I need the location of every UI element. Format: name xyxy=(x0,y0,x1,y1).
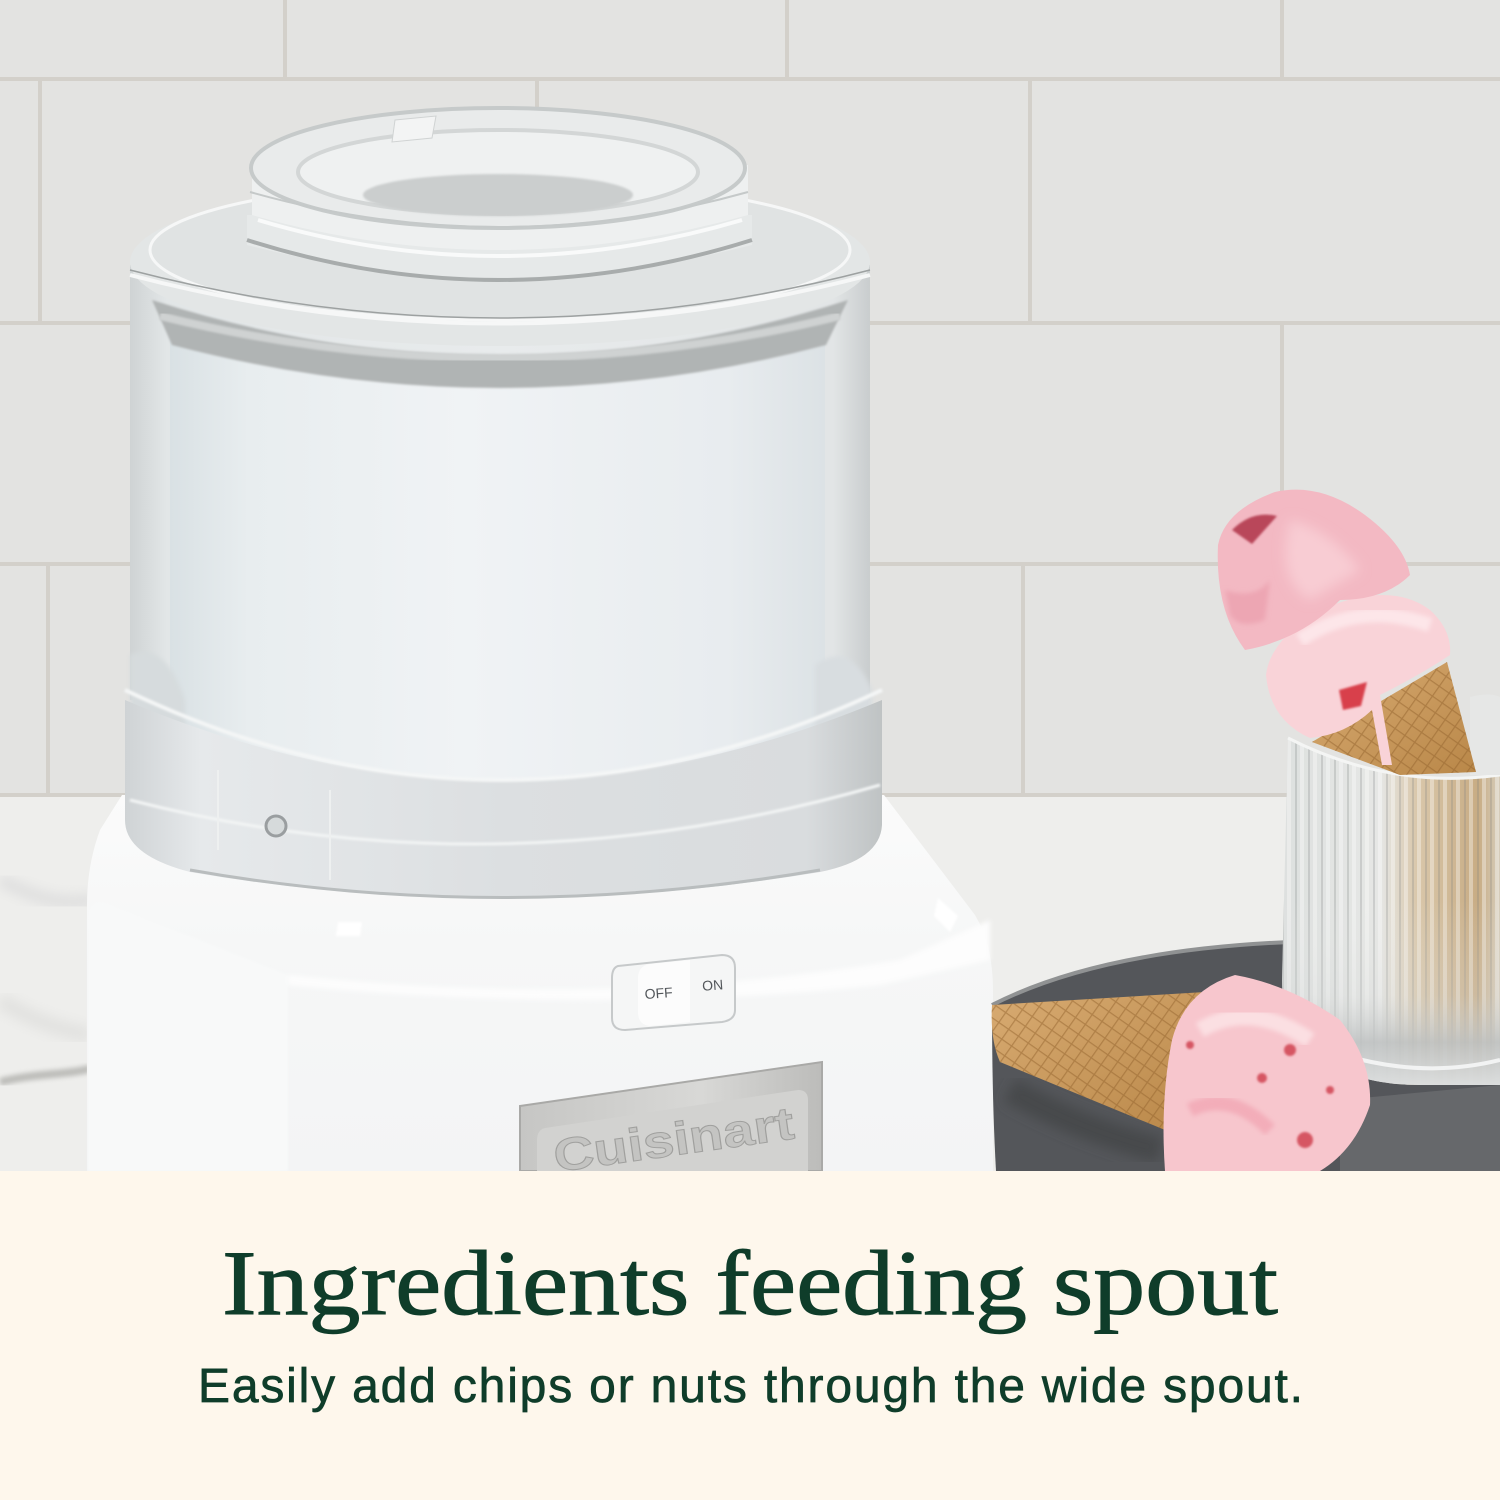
caption panel xyxy=(0,1171,1500,1500)
metal brand badge xyxy=(520,1062,822,1182)
photo scene xyxy=(0,0,1500,1182)
collar ring xyxy=(125,690,882,898)
tiled wall xyxy=(0,0,1500,800)
ice cream scoop on plate xyxy=(1164,975,1370,1171)
white base xyxy=(87,795,993,1171)
power switch xyxy=(612,955,735,1030)
subheading: Easily add chips or nuts through the wide spout. xyxy=(198,1360,1303,1413)
white freezer bowl xyxy=(130,270,872,790)
power switch: OFF xyxy=(644,984,673,1002)
metal brand badge: Cuisinart xyxy=(550,1097,797,1182)
feeding spout xyxy=(247,108,752,280)
marble counter xyxy=(0,797,1286,1171)
waffle cone in glass xyxy=(1312,662,1476,775)
clear outer lid cylinder xyxy=(130,178,870,700)
glass with cone xyxy=(1282,736,1500,1085)
stacked ice cream scoops xyxy=(1218,490,1450,765)
collar latch xyxy=(266,816,286,836)
waffle cone on plate xyxy=(992,992,1205,1130)
heading: Ingredients feeding spout xyxy=(222,1232,1278,1334)
power switch: ON xyxy=(702,976,724,994)
ice cream maker xyxy=(87,108,993,1182)
dark plate xyxy=(992,942,1500,1171)
